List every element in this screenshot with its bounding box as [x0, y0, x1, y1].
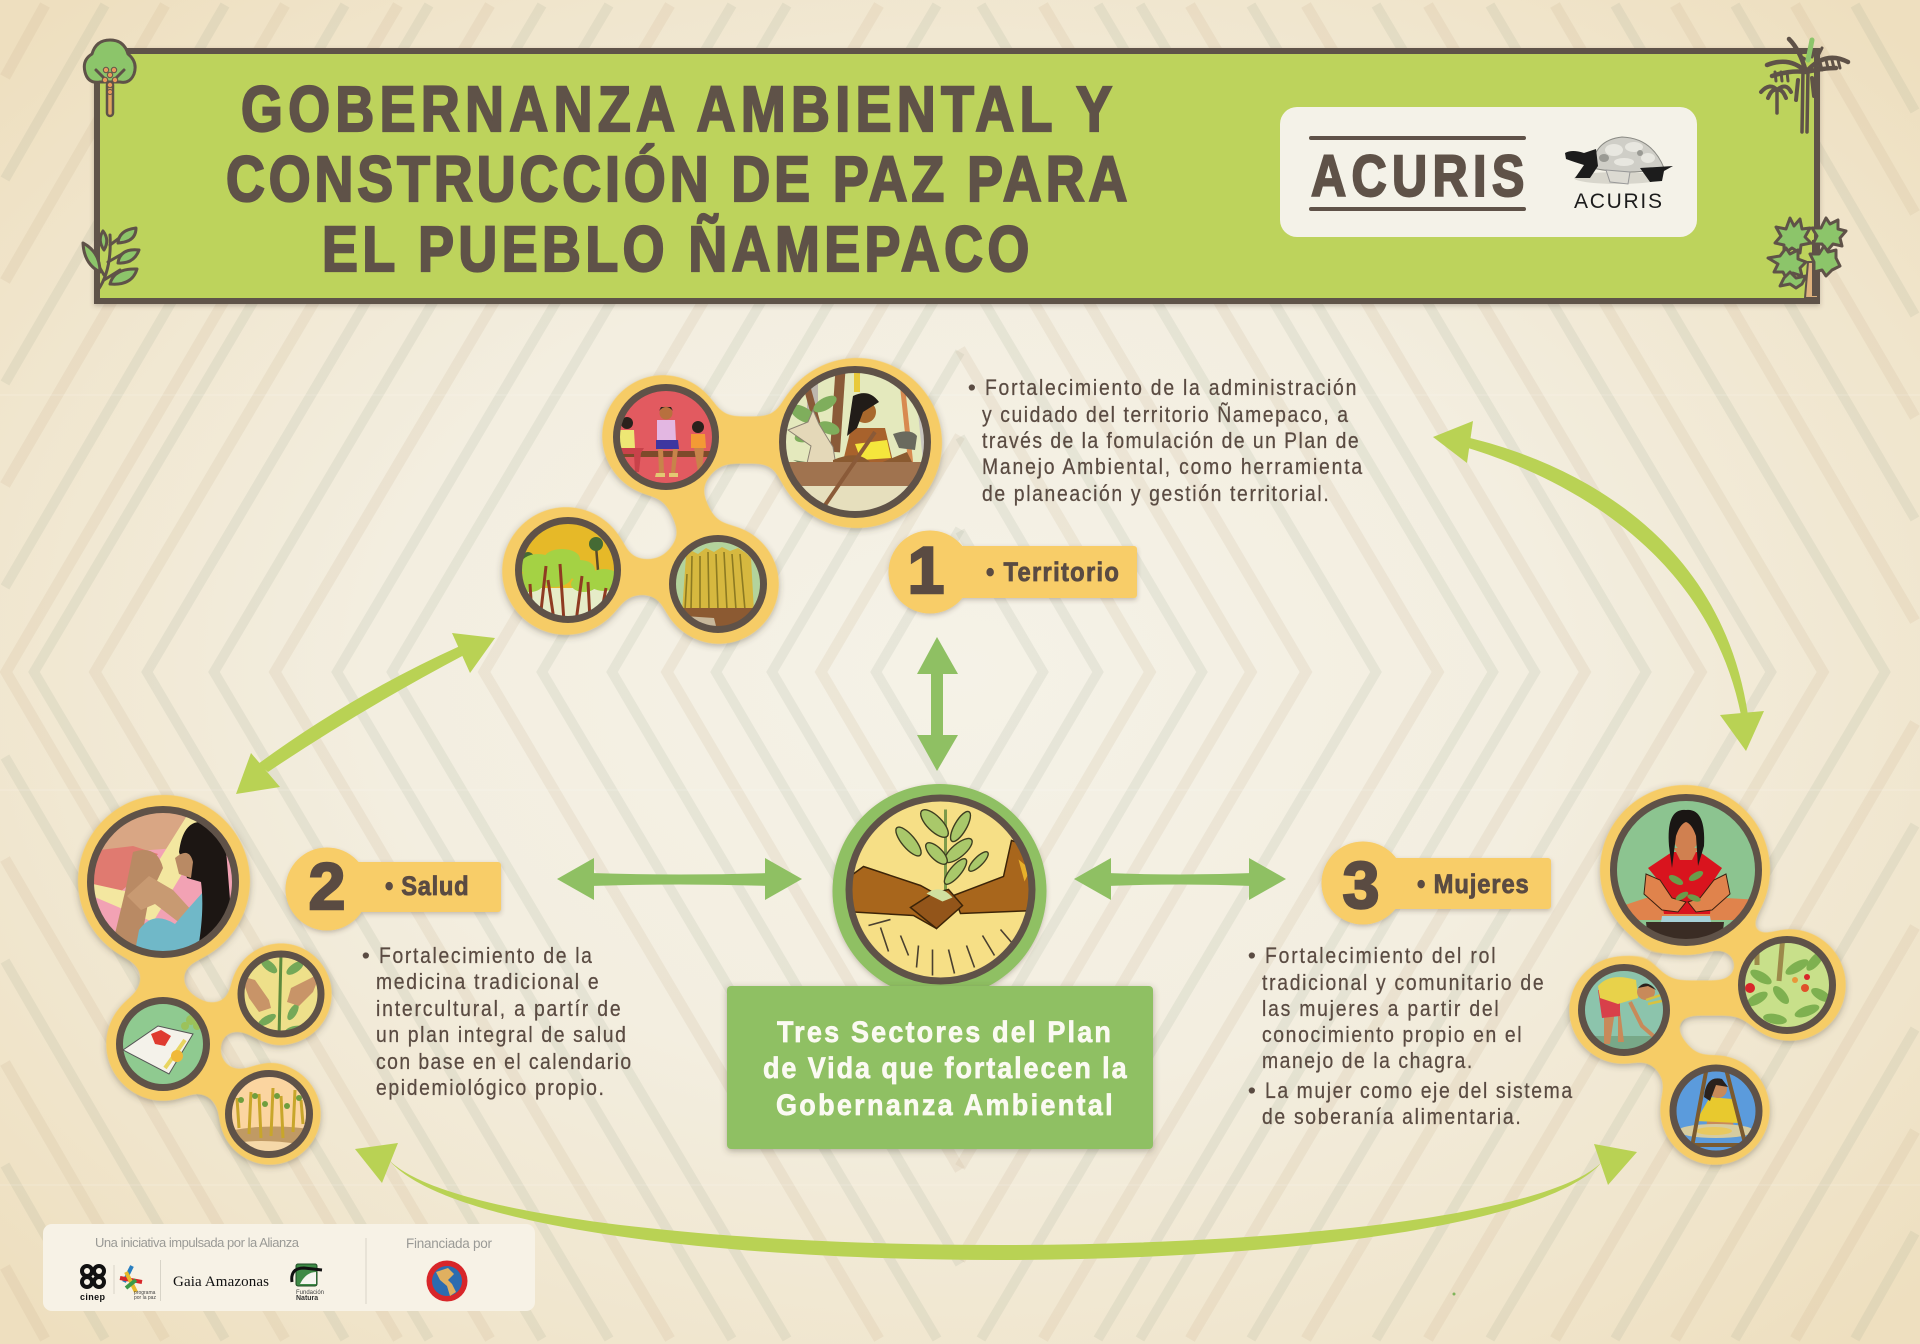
text block: Territorio description: través de la fomulación de un Plan de	[982, 429, 1359, 453]
text block: Mujeres description: •	[1248, 943, 1256, 968]
icon: fruit tree	[84, 40, 135, 116]
text: funded by: Financiada por	[406, 1236, 492, 1251]
text block: Salud description: medicina tradicional e	[376, 970, 599, 994]
text block: Territorio description: Fortalecimiento de la administración	[985, 376, 1356, 400]
logo: cinep: cinep	[80, 1292, 106, 1302]
heading text: Gobernanza Ambiental	[776, 1089, 1113, 1122]
illustration: chagra plants with red fruits	[1737, 935, 1837, 1035]
panel: central illustration and heading	[727, 784, 1153, 1149]
logo panel: ACURIS	[1280, 107, 1697, 237]
arrow: top sector to health sector	[236, 633, 495, 794]
text block: Salud description	[362, 943, 631, 1100]
arrow: centre to Mujeres	[1074, 858, 1286, 900]
panel: Territorio illustrations cluster	[502, 358, 942, 644]
illustration: hands holding a seedling	[844, 794, 1036, 984]
banner frame	[97, 51, 1817, 301]
heading text: Tres Sectores del Plan	[777, 1016, 1111, 1049]
text block: Territorio description: •	[968, 375, 976, 400]
icon: palm tree bottom right	[1768, 218, 1846, 298]
logo: Fundación Natura	[292, 1264, 324, 1302]
number 2: 2	[309, 849, 345, 923]
arrow: health sector to women sector	[355, 1143, 1637, 1260]
illustration: open book with red mark	[116, 997, 210, 1091]
text block: Salud description: intercultural, a partír de	[376, 997, 621, 1021]
logo: Fundación Natura: Natura	[296, 1295, 318, 1302]
text block: Territorio description: de planeación y gestión territorial.	[982, 482, 1329, 506]
tag	[286, 848, 501, 930]
panel: Mujeres illustrations cluster	[1569, 785, 1846, 1165]
illustration: woman bending over crops	[1578, 964, 1670, 1056]
logo: programa por la paz: programa	[134, 1290, 156, 1296]
heading text	[763, 1016, 1128, 1122]
illustration: woman planting seedling	[1606, 790, 1766, 950]
text block: Salud description: con base en el calendario	[376, 1050, 631, 1074]
tag text: • Territorio	[986, 558, 1119, 587]
illustration: traditional healing massage	[83, 802, 243, 962]
text block: Territorio description: Manejo Ambiental, como herramienta	[982, 455, 1363, 479]
text block: Mujeres description: •	[1248, 1078, 1256, 1103]
icon: palm trees top right	[1761, 39, 1848, 132]
text block: Territorio description	[968, 375, 1363, 506]
illustration: medicinal plants on soil	[223, 1068, 315, 1160]
logo: Fundación Natura: Fundación	[296, 1290, 324, 1296]
cluster background	[1569, 785, 1846, 1165]
text block: Mujeres description: las mujeres a partir del	[1262, 997, 1499, 1021]
logo: Gaia Amazonas: Gaia Amazonas	[173, 1274, 269, 1290]
number 1: 1	[908, 533, 944, 607]
panel: footer partners	[43, 1224, 535, 1311]
logo panel: ACURIS: ACURIS	[1574, 190, 1662, 213]
panel: Salud illustrations cluster	[78, 795, 332, 1165]
text block: Salud description: Fortalecimiento de la	[379, 944, 592, 968]
heading box	[727, 986, 1153, 1149]
text block: Mujeres description: conocimiento propio en el	[1262, 1023, 1522, 1047]
text block: Mujeres description: de soberanía alimentaria.	[1262, 1105, 1521, 1129]
arrow: centre to Salud	[557, 858, 802, 900]
title: GOBERNANZA AMBIENTAL Y	[241, 73, 1112, 145]
illustration: woman sifting under tripod	[1670, 1064, 1762, 1158]
green ring	[832, 784, 1046, 998]
mark: small green dot	[1452, 1292, 1456, 1296]
title	[226, 73, 1127, 285]
text block: Mujeres description: tradicional y comunitario de	[1262, 971, 1544, 995]
illustration: hands tending a plant	[238, 950, 324, 1038]
panel: Mujeres label	[1322, 842, 1551, 924]
icon: tortoise	[1565, 137, 1673, 184]
text block: Territorio description: y cuidado del territorio Ñamepaco, a	[982, 402, 1349, 427]
text: initiative: Una iniciativa impulsada por la Alianza	[95, 1235, 300, 1250]
panel: Salud label	[286, 848, 501, 930]
title: CONSTRUCCIÓN DE PAZ PARA	[226, 143, 1127, 215]
logo panel: ACURIS: ACURIS	[1311, 145, 1524, 209]
cluster background	[502, 358, 942, 644]
logo: programa por la paz	[120, 1266, 156, 1301]
panel: Territorio label	[888, 530, 1137, 614]
logo: cinep	[80, 1266, 106, 1302]
tag text: • Salud	[385, 872, 469, 901]
icon: leafy branch	[83, 228, 139, 290]
footer background	[43, 1224, 535, 1311]
logo: programa por la paz: por la paz	[134, 1295, 156, 1301]
illustration: forest canopy	[513, 515, 623, 628]
text block: Salud description: epidemiológico propio.	[376, 1076, 604, 1100]
logo: inter-american foundation globe	[426, 1260, 468, 1302]
illustration: three people on a bench	[611, 382, 721, 492]
panel: title banner	[83, 39, 1848, 301]
illustration: woman paddling canoe with dog	[775, 362, 935, 522]
number 3: 3	[1343, 848, 1379, 922]
text block: Salud description: •	[362, 943, 370, 968]
arrow: centre to Territorio	[917, 637, 958, 771]
illustration: basket of wheat	[668, 534, 768, 634]
text block: Mujeres description: manejo de la chagra.	[1262, 1049, 1472, 1073]
tag text: • Mujeres	[1417, 870, 1529, 899]
tag	[1322, 842, 1551, 924]
text block: Mujeres description: La mujer como eje del sistema	[1265, 1079, 1573, 1103]
heading text: de Vida que fortalecen la	[763, 1052, 1128, 1085]
title: EL PUEBLO ÑAMEPACO	[322, 213, 1029, 285]
tag	[888, 530, 1137, 614]
cluster background	[78, 795, 332, 1165]
arrow: top sector to women sector	[1433, 421, 1764, 751]
text block: Salud description: un plan integral de salud	[376, 1023, 626, 1047]
text block: Mujeres description: Fortalecimiento del rol	[1265, 944, 1496, 968]
text block: Mujeres description	[1248, 943, 1573, 1129]
